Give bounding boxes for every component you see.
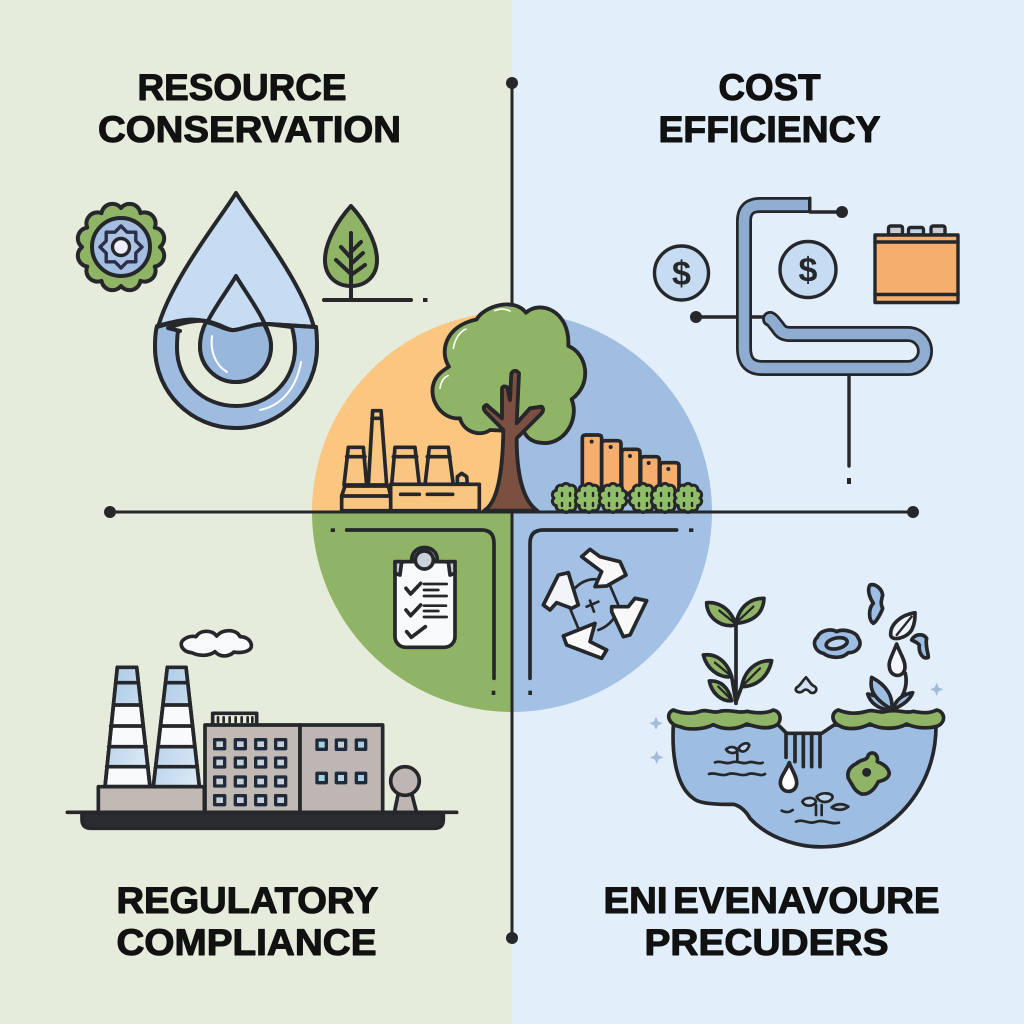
icon: flower gear — [78, 204, 164, 290]
underwater sprouts and ripples — [709, 743, 848, 823]
central circle divided into four quadrants — [312, 312, 712, 712]
icon: pipe with connectors — [690, 198, 925, 484]
algae clump — [848, 753, 889, 794]
icon: right dollar coin: $ — [799, 252, 818, 290]
building windows — [215, 740, 366, 805]
right striped chimney — [153, 667, 199, 787]
panel: right background — [512, 0, 1024, 1024]
icon: left dollar coin: $ — [672, 255, 691, 293]
left grass bank — [669, 710, 780, 729]
icon: orange bar columns — [582, 435, 679, 493]
icon: leaf tree — [324, 206, 428, 302]
water drop — [780, 763, 797, 791]
lotus and droplets on the right bank — [868, 585, 928, 710]
icon: factory in circle — [342, 411, 479, 511]
left striped chimney — [105, 667, 150, 787]
illustration: pond ecosystem — [649, 585, 944, 847]
illustration: central tree — [432, 304, 585, 511]
icon: battery — [875, 226, 958, 302]
small trefoil — [796, 677, 816, 693]
illustration: factory with smokestacks — [67, 667, 457, 828]
heading: cost efficiency — [658, 66, 880, 150]
heading: resource conservation: RESOURCE — [138, 66, 346, 108]
icon: large water drop — [155, 193, 317, 428]
heading: eni evenavoure precuders — [604, 879, 940, 963]
sparkles — [649, 683, 943, 764]
channel lines — [786, 733, 820, 767]
icon: left dollar coin — [654, 246, 708, 300]
horizontal axis with end dots — [104, 506, 919, 518]
panel: left background — [0, 0, 512, 1024]
icon: recycling arrows — [528, 528, 693, 695]
floating blob — [815, 630, 860, 657]
right grass bank — [833, 710, 944, 729]
heading: regulatory compliance: COMPLIANCE — [116, 921, 376, 963]
heading: resource conservation: CONSERVATION — [98, 108, 401, 150]
vertical axis with end dots — [506, 77, 518, 944]
heading: eni evenavoure precuders: ENI EVENAVOURE — [604, 879, 940, 921]
spherical tank — [391, 767, 419, 813]
icon: right dollar coin — [780, 242, 836, 298]
heading: eni evenavoure precuders: PRECUDERS — [644, 921, 888, 963]
icon: row of bushes — [552, 483, 702, 513]
water basin — [673, 725, 936, 847]
heading: resource conservation — [98, 66, 401, 150]
heading: regulatory compliance — [116, 879, 378, 963]
heading: regulatory compliance: REGULATORY — [116, 879, 378, 921]
left sprout — [703, 598, 772, 703]
icon: cloud — [181, 631, 251, 656]
icon: clipboard checklist — [331, 528, 495, 695]
heading: cost efficiency: EFFICIENCY — [658, 108, 880, 150]
heading: cost efficiency: COST — [718, 66, 821, 108]
